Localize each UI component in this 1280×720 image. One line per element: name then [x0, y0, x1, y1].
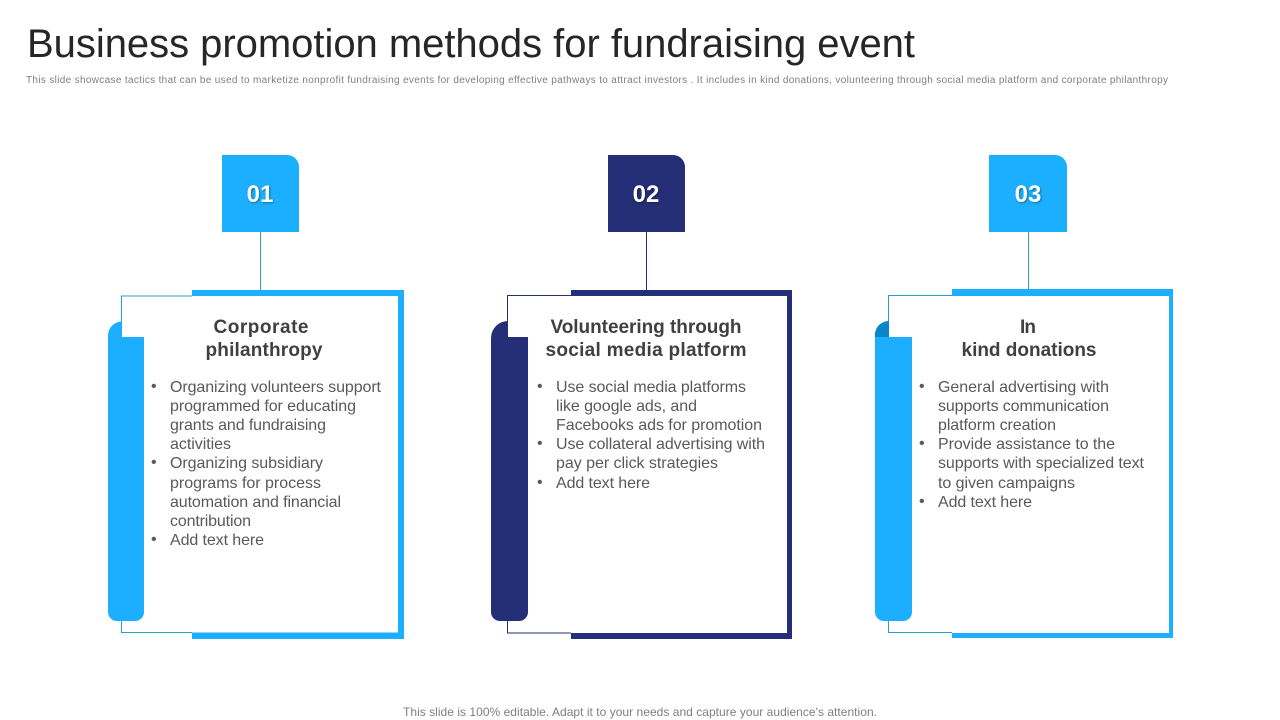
- card frame 02: [508, 290, 792, 639]
- bullet list 03: •: [919, 435, 925, 452]
- bullet list 03: supports communication: [938, 398, 1109, 415]
- bullet list 01: Organizing subsidiary: [170, 455, 323, 472]
- bullet list 02: •: [537, 378, 543, 395]
- bullet list 03: platform creation: [938, 417, 1056, 434]
- connector 02: [646, 232, 647, 290]
- heading 03: In: [1020, 317, 1036, 338]
- heading 02: [546, 317, 746, 361]
- subtitle: This slide showcase tactics that can be used to marketize nonprofit fundraising events for developing effective pathways to attract investors . It includes in kind donations, volunteering through social media platform and corporate philanthropy: [26, 75, 1168, 86]
- bullet list 03: •: [919, 378, 925, 395]
- bullet list 01: Add text here: [170, 532, 264, 549]
- bullet list 01: automation and financial: [170, 494, 341, 511]
- heading 03: kind donations: [962, 340, 1096, 361]
- connector 03: [1028, 232, 1029, 290]
- number badge 02: [608, 155, 685, 232]
- bullet list 02: Add text here: [556, 475, 650, 492]
- number badge 02: 02: [633, 181, 659, 208]
- bullet list 01: •: [151, 454, 157, 471]
- heading 03: [962, 317, 1096, 361]
- bullet list 02: pay per click strategies: [556, 455, 718, 472]
- heading 01: philanthropy: [206, 340, 323, 361]
- panel: volunteering through social media: [491, 155, 792, 639]
- bullet list 01: [151, 378, 382, 549]
- heading 02: Volunteering through: [550, 317, 742, 338]
- bullet list 02: Use collateral advertising with: [556, 436, 765, 453]
- footer note: This slide is 100% editable. Adapt it to your needs and capture your audience's attention.: [403, 705, 877, 719]
- bullet list 03: Provide assistance to the: [938, 436, 1115, 453]
- number badge 03: 03: [1015, 181, 1041, 208]
- bullet list 03: Add text here: [938, 494, 1032, 511]
- number badge 01: 01: [247, 181, 273, 208]
- bullet list 02: •: [537, 435, 543, 452]
- side bar 02: [491, 321, 528, 621]
- bullet list 01: •: [151, 531, 157, 548]
- bullet list 02: •: [537, 474, 543, 491]
- bullet list 02: Use social media platforms: [556, 379, 746, 396]
- bullet list 01: contribution: [170, 513, 251, 530]
- bullet list 03: to given campaigns: [938, 475, 1075, 492]
- panel: in kind donations: [875, 155, 1173, 638]
- bullet list 02: Facebooks ads for promotion: [556, 417, 762, 434]
- bullet list 01: activities: [170, 436, 231, 453]
- bullet list 01: programs for process: [170, 475, 321, 492]
- card frame 01: [122, 290, 404, 639]
- bullet list 03: supports with specialized text: [938, 455, 1145, 472]
- number badge 01: [222, 155, 299, 232]
- side bar 01: [108, 322, 144, 621]
- connector 01: [260, 232, 261, 290]
- title: Business promotion methods for fundraising event: [27, 22, 915, 66]
- bullet list 01: programmed for educating: [170, 398, 356, 415]
- bullet list 01: Organizing volunteers support: [170, 379, 382, 396]
- side bar 03: [875, 321, 912, 621]
- bullet list 01: grants and fundraising: [170, 417, 326, 434]
- bullet list 01: •: [151, 378, 157, 395]
- bullet list 03: •: [919, 493, 925, 510]
- heading 02: social media platform: [546, 340, 746, 361]
- heading 01: [206, 317, 323, 361]
- bullet list 02: [537, 378, 765, 492]
- bullet list 02: like google ads, and: [556, 398, 697, 415]
- panel: corporate philanthropy: [108, 155, 404, 639]
- number badge 03: [989, 155, 1067, 232]
- bullet list 03: General advertising with: [938, 379, 1109, 396]
- heading 01: Corporate: [214, 317, 308, 338]
- card frame 03: [888, 289, 1173, 638]
- bullet list 03: [919, 378, 1145, 511]
